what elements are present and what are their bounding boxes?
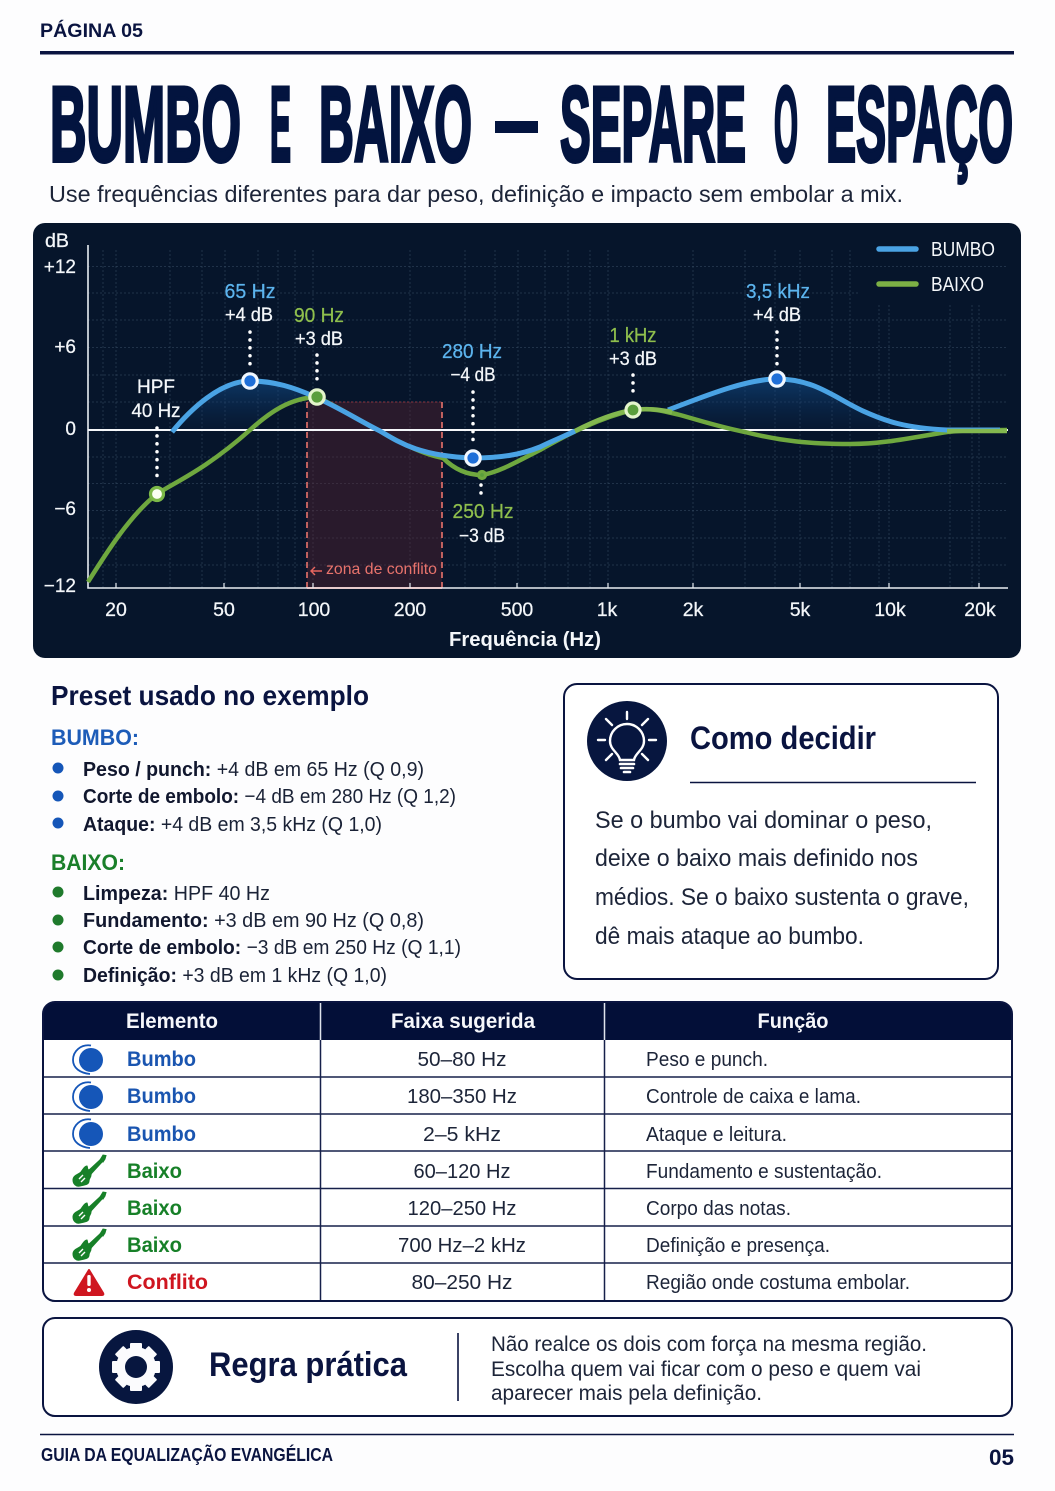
callouts: frequency labels: 90 Hz xyxy=(294,305,344,327)
axes xyxy=(88,245,1008,588)
title: SEPARE xyxy=(560,64,746,184)
callouts: frequency labels: HPF xyxy=(137,377,175,398)
baixo subheading: BAIXO: xyxy=(51,850,125,875)
column: elemento xyxy=(127,1047,208,1294)
callout: dotted leaders xyxy=(157,332,777,495)
bumbo list: Peso / punch: +4 dB em 65 Hz (Q 0,9) xyxy=(83,758,424,781)
text block xyxy=(491,1333,927,1405)
column: elemento: Baixo xyxy=(127,1233,182,1257)
column: funcao: Controle de caixa e lama. xyxy=(646,1086,861,1108)
panel heading: Como decidir xyxy=(690,720,876,756)
callouts: frequency labels xyxy=(132,281,810,547)
boost glow xyxy=(172,379,947,430)
markers xyxy=(150,372,784,500)
icon: gear xyxy=(99,1330,173,1404)
column: elemento: Conflito xyxy=(127,1270,208,1294)
baixo list: Fundamento: +3 dB em 90 Hz (Q 0,8) xyxy=(83,909,424,932)
x axis labels: 200 xyxy=(394,599,426,621)
y axis labels: +12 xyxy=(44,257,76,278)
callouts: frequency labels: +3 dB xyxy=(609,349,657,370)
bumbo list xyxy=(52,758,456,836)
x axis labels: 100 xyxy=(298,599,330,621)
x axis labels: 500 xyxy=(501,599,533,621)
baixo list xyxy=(52,882,461,987)
column: funcao xyxy=(646,1049,910,1294)
panel: preset xyxy=(51,680,461,987)
table header: Função xyxy=(758,1010,828,1033)
column: elemento: Bumbo xyxy=(127,1047,196,1071)
text block xyxy=(595,807,969,950)
legend xyxy=(879,239,995,296)
curve: bumbo xyxy=(172,379,1000,458)
column: faixa: 60–120 Hz xyxy=(414,1161,510,1183)
title xyxy=(50,64,1013,184)
text block: Se o bumbo vai dominar o peso, xyxy=(595,807,932,834)
bumbo list: Ataque: +4 dB em 3,5 kHz (Q 1,0) xyxy=(83,813,382,836)
icon: light bulb xyxy=(587,701,667,781)
y axis labels: −6 xyxy=(54,499,76,520)
text block: aparecer mais pela definição. xyxy=(491,1382,762,1405)
title: O xyxy=(774,64,798,184)
table header: Elemento xyxy=(126,1010,218,1033)
x axis labels: 1k xyxy=(597,599,618,621)
column: elemento: Baixo xyxy=(127,1196,182,1220)
curve: baixo xyxy=(88,397,1007,582)
table header: Faixa sugerida xyxy=(391,1010,535,1033)
panel: regra pratica xyxy=(43,1318,1012,1416)
column: funcao: Corpo das notas. xyxy=(646,1198,791,1220)
text block: dê mais ataque ao bumbo. xyxy=(595,923,864,950)
callouts: frequency labels: +3 dB xyxy=(295,329,343,350)
x axis labels: 50 xyxy=(213,599,235,621)
heading: Preset usado no exemplo xyxy=(51,680,369,711)
text block: deixe o baixo mais definido nos xyxy=(595,845,918,872)
baixo list: Corte de embolo: −3 dB em 250 Hz (Q 1,1) xyxy=(83,936,461,959)
heading: Regra prática xyxy=(209,1346,408,1384)
column: elemento: Bumbo xyxy=(127,1122,196,1146)
y axis labels: −12 xyxy=(44,576,76,597)
bumbo subheading: BUMBO: xyxy=(51,725,139,750)
callouts: frequency labels: −4 dB xyxy=(450,365,496,386)
column: funcao: Peso e punch. xyxy=(646,1049,768,1071)
conflict zone: zona de conflito xyxy=(326,561,437,578)
column: faixa: 700 Hz–2 kHz xyxy=(398,1235,526,1257)
footer: GUIA DA EQUALIZAÇÃO EVANGÉLICA xyxy=(41,1444,333,1465)
column: funcao: Região onde costuma embolar. xyxy=(646,1272,910,1294)
title: BAIXO xyxy=(319,64,472,184)
callouts: frequency labels: −3 dB xyxy=(459,526,505,547)
callouts: frequency labels: 1 kHz xyxy=(610,325,656,347)
x axis labels: 20k xyxy=(964,599,996,621)
x axis labels: 10k xyxy=(874,599,906,621)
callouts: frequency labels: 65 Hz xyxy=(224,281,276,303)
column: faixa: 120–250 Hz xyxy=(408,1198,516,1220)
column: funcao: Fundamento e sustentação. xyxy=(646,1161,882,1183)
chart grid xyxy=(88,250,1008,588)
title: BUMBO xyxy=(50,64,241,184)
text block: Escolha quem vai ficar com o peso e quem vai xyxy=(491,1358,921,1381)
column: funcao: Definição e presença. xyxy=(646,1235,830,1257)
column: faixa: 2–5 kHz xyxy=(423,1124,501,1146)
column: elemento: Baixo xyxy=(127,1159,182,1183)
baixo list: Definição: +3 dB em 1 kHz (Q 1,0) xyxy=(83,964,387,987)
legend: BUMBO xyxy=(931,239,995,261)
page label: PÁGINA 05 xyxy=(40,19,143,42)
callouts: frequency labels: 40 Hz xyxy=(132,401,180,422)
x axis labels: 2k xyxy=(683,599,704,621)
y axis labels: +6 xyxy=(54,337,76,358)
subtitle: Use frequências diferentes para dar peso, definição e impacto sem embolar a mix. xyxy=(49,181,903,207)
x axis labels: 20 xyxy=(105,599,127,621)
column: faixa: 80–250 Hz xyxy=(412,1272,512,1294)
y axis labels: 0 xyxy=(65,419,76,440)
title: E xyxy=(270,64,291,184)
panel: como decidir xyxy=(564,684,998,979)
table header xyxy=(126,1010,828,1033)
column: elemento: Bumbo xyxy=(127,1084,196,1108)
callouts: frequency labels: 280 Hz xyxy=(442,341,502,363)
baixo list: Limpeza: HPF 40 Hz xyxy=(83,882,270,905)
column: faixa: 180–350 Hz xyxy=(407,1086,517,1108)
footer xyxy=(40,1434,1014,1470)
legend: BAIXO xyxy=(931,274,984,296)
conflict zone xyxy=(307,402,442,588)
x axis labels xyxy=(105,599,996,621)
x axis labels: 5k xyxy=(790,599,811,621)
panel: EQ chart xyxy=(33,223,1021,658)
row icons xyxy=(73,1045,106,1295)
text block: médios. Se o baixo sustenta o grave, xyxy=(595,884,969,911)
callouts: frequency labels: 3,5 kHz xyxy=(746,281,810,303)
bumbo list: Corte de embolo: −4 dB em 280 Hz (Q 1,2) xyxy=(83,785,456,808)
table xyxy=(43,1002,1012,1301)
column: faixa: 50–80 Hz xyxy=(418,1049,506,1071)
x axis title: Frequência (Hz) xyxy=(449,629,601,651)
callouts: frequency labels: 250 Hz xyxy=(452,501,514,523)
y axis labels xyxy=(44,231,76,597)
callouts: frequency labels: +4 dB xyxy=(225,305,273,326)
callouts: frequency labels: +4 dB xyxy=(753,305,801,326)
column: faixa xyxy=(398,1049,526,1294)
text block: Não realce os dois com força na mesma região. xyxy=(491,1333,927,1356)
column: funcao: Ataque e leitura. xyxy=(646,1124,787,1146)
y axis labels: dB xyxy=(45,231,69,252)
footer: 05 xyxy=(989,1445,1014,1470)
